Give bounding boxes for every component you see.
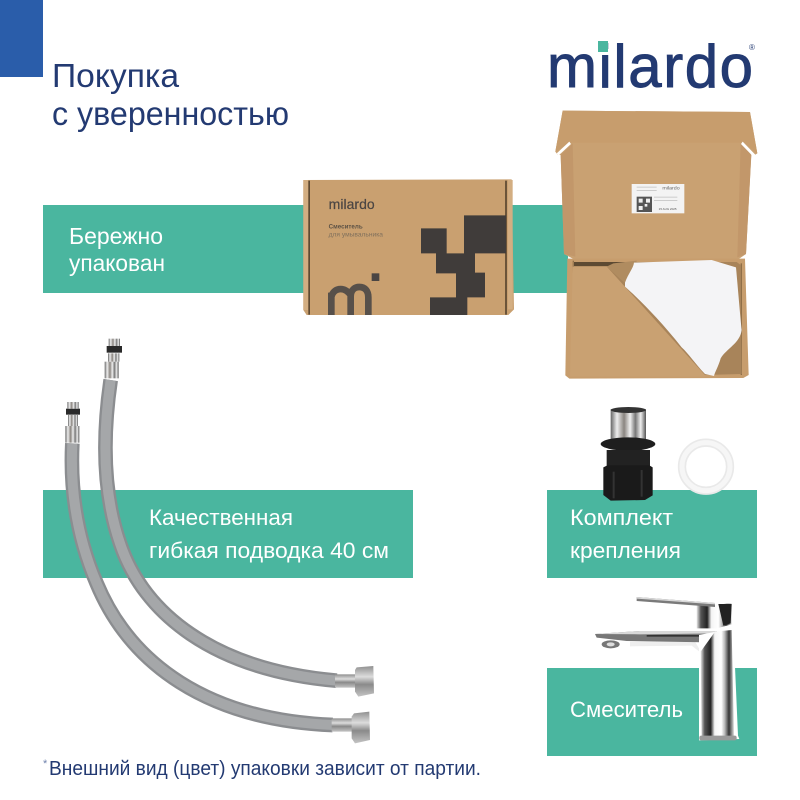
title: Покупка (52, 57, 180, 94)
footnote: * (43, 758, 48, 770)
teal band: mounting kit: крепления (570, 538, 681, 563)
title: с уверенностью (52, 95, 289, 132)
teal band: mixer: Смеситель (570, 697, 683, 722)
title (52, 57, 289, 132)
closed cardboard box (303, 179, 514, 315)
box product text: для умывальника (329, 232, 384, 238)
lid label: 15 AUG 2025 (659, 207, 677, 211)
teal band: flexible hoses: гибкая подводка 40 см (149, 538, 389, 563)
teal band: mounting kit: Комплект (570, 505, 673, 530)
box product text (329, 224, 384, 238)
hose 1 (105, 339, 374, 697)
teal band: carefully packed: Бережно (69, 223, 163, 249)
lid (555, 111, 757, 260)
footnote: Внешний вид (цвет) упаковки зависит от партии. (49, 757, 481, 780)
faucet body (699, 628, 739, 740)
threaded sleeve with black nut (601, 407, 655, 501)
hose 2 (65, 402, 370, 743)
lid label: milardo (662, 185, 680, 190)
box base (565, 259, 749, 379)
teal band: carefully packed: упакован (69, 250, 165, 276)
teal band: flexible hoses (43, 490, 413, 578)
teal band: mounting kit (547, 490, 757, 578)
faucet lever (637, 597, 732, 628)
box pixel pattern (421, 215, 506, 315)
box logo: milardo (329, 196, 375, 212)
faucet spout (595, 631, 717, 668)
teal band: mixer (547, 668, 757, 756)
teal band: carefully packed (43, 205, 568, 293)
mounting kit parts (601, 407, 730, 501)
blue corner block (0, 0, 43, 77)
open cardboard box (555, 111, 757, 379)
box m mark (331, 273, 379, 315)
brand logo: milardo (547, 33, 753, 100)
teal band: flexible hoses: Качественная (149, 505, 293, 530)
white rubber ring (682, 443, 730, 491)
flexible hoses (65, 339, 374, 743)
brand logo: ® (749, 43, 755, 52)
box product text: Смеситель (329, 224, 363, 230)
lid label (632, 184, 684, 213)
white wrapping cloth (625, 260, 742, 376)
chrome mixer faucet (595, 597, 739, 740)
